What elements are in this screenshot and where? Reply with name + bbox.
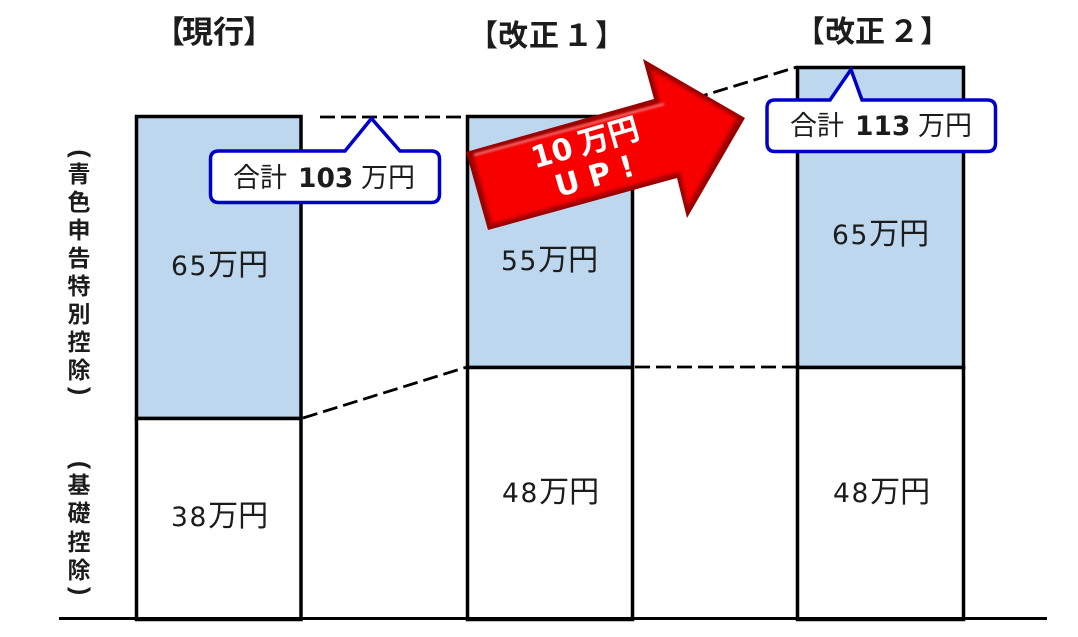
callout: total 103: 万円 [361, 156, 415, 195]
column: revision 1: 55万円 [501, 235, 598, 279]
vertical axis label: blue return deduction: 色 [68, 183, 90, 217]
vertical axis label: blue return deduction [66, 149, 94, 395]
heading: current: 【現行】 [154, 7, 274, 52]
vertical axis label: blue return deduction: 特 [68, 267, 90, 301]
column: revision 2 [798, 68, 964, 620]
column: current: 65万円 [171, 240, 268, 284]
arrow: 10万円 UP [466, 59, 745, 230]
dashed connectors [303, 67, 797, 418]
vertical axis label: basic deduction: ) [66, 587, 94, 595]
heading: revision 2: 【改正２】 [795, 7, 950, 51]
vertical axis label: blue return deduction: 申 [68, 211, 90, 245]
column: current [136, 116, 301, 620]
callout: total 103: 合計 [233, 156, 287, 195]
baseline [59, 617, 1047, 620]
vertical axis label: basic deduction: 礎 [68, 494, 90, 528]
callout: total 103: 103 [298, 163, 353, 194]
vertical axis label: blue return deduction: 別 [68, 295, 90, 329]
callout: total 113: 113 [855, 111, 910, 142]
arrow: 10万円 UP: 10 万円 [525, 103, 644, 177]
vertical axis label: blue return deduction: 青 [68, 155, 90, 189]
heading: revision 1: 【改正１】 [468, 11, 625, 55]
column: revision 1: 48万円 [502, 467, 599, 511]
callout: total 113 [767, 70, 996, 152]
vertical axis label: basic deduction [66, 461, 94, 595]
vertical axis label: blue return deduction: 控 [68, 323, 90, 357]
arrow: 10万円 UP: U P ! [551, 149, 639, 205]
column: revision 2: 48万円 [833, 467, 930, 511]
vertical axis label: basic deduction: 控 [68, 523, 90, 557]
vertical axis label: blue return deduction: 告 [68, 239, 90, 273]
vertical axis label: basic deduction: 除 [68, 551, 90, 585]
vertical axis label: basic deduction: 基 [68, 466, 90, 500]
column: current: 38万円 [171, 491, 268, 535]
callout: total 103 [210, 118, 440, 202]
vertical axis label: blue return deduction: ( [66, 149, 94, 158]
vertical axis label: blue return deduction: 除 [68, 351, 90, 385]
column: revision 1 [468, 116, 632, 620]
vertical axis label: basic deduction: ( [66, 461, 94, 470]
column: revision 2: 65万円 [832, 209, 929, 253]
callout: total 113: 合計 [790, 104, 844, 143]
vertical axis label: blue return deduction: ) [66, 387, 94, 395]
callout: total 113: 万円 [918, 104, 972, 143]
